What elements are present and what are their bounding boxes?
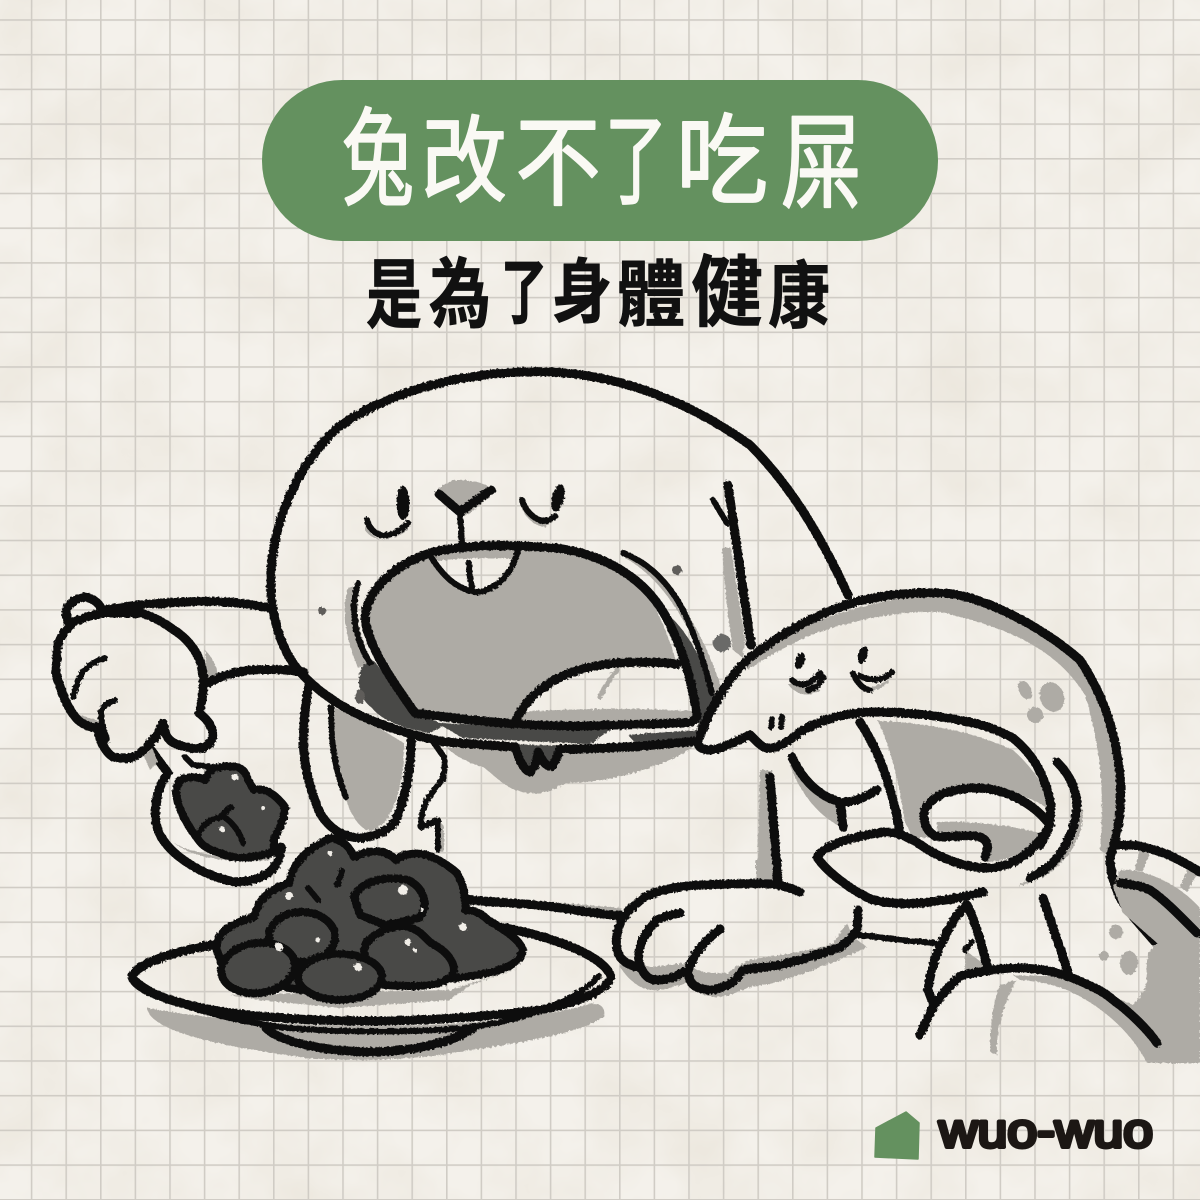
- cheek lines and dots: [354, 553, 712, 693]
- ear behind head: [722, 548, 745, 658]
- nose: [435, 480, 494, 516]
- subtitle: 健: [691, 249, 763, 336]
- poop pile: [216, 838, 523, 1008]
- skin spots: [1015, 678, 1138, 975]
- plate with shadow: [132, 927, 611, 1060]
- tongue curl: [924, 788, 1050, 857]
- eyes: [396, 486, 410, 520]
- small mouth interior: [878, 721, 1050, 838]
- bunny head: [271, 372, 848, 793]
- bunny body lines: [421, 743, 622, 917]
- spoon with poop: [151, 750, 285, 882]
- small head outline: [698, 593, 1155, 942]
- title pill: [262, 80, 938, 241]
- teeth: [430, 550, 518, 592]
- title text: 屎: [781, 106, 861, 221]
- subtitle: 康: [768, 257, 830, 337]
- body and collar, lower right: [920, 845, 1200, 1063]
- subtitle: 身: [552, 253, 612, 332]
- title text: [342, 102, 861, 221]
- subtitle: 為: [429, 252, 491, 337]
- dark shading around mouth: [628, 613, 715, 748]
- title text: 不: [516, 110, 600, 219]
- title text: 改: [421, 109, 507, 215]
- neck shading: [788, 755, 843, 828]
- subtitle: 是: [366, 255, 422, 339]
- inner head shading: [747, 593, 1123, 857]
- bunny hand and arm: [56, 597, 304, 770]
- mouth outline: [365, 546, 697, 726]
- head outline: [271, 372, 848, 672]
- title text: 吃: [676, 108, 768, 217]
- subtitle: 體: [617, 255, 685, 335]
- title text: 兔: [342, 102, 414, 220]
- title text: 了: [605, 108, 667, 217]
- small bunny: [698, 593, 1155, 975]
- subtitle: [366, 249, 830, 339]
- tongue line: [515, 662, 677, 722]
- throat line: [860, 722, 900, 835]
- arc beside mouth: [1030, 762, 1077, 878]
- illustration: [56, 372, 1200, 1063]
- logo: [875, 1105, 1153, 1159]
- neck lines: [792, 757, 877, 802]
- logo wordmark: wuo-wuo: [938, 1105, 1153, 1158]
- bunny paw: [616, 860, 935, 997]
- shadow below chin: [447, 743, 697, 793]
- bunny left ear: [303, 687, 411, 838]
- logo house icon: [875, 1112, 919, 1159]
- lower lip: [817, 825, 1050, 904]
- subtitle: 了: [501, 253, 547, 333]
- mouth interior: [365, 547, 677, 722]
- closed eyes: [793, 652, 807, 670]
- snout and upper lip: [698, 712, 1051, 845]
